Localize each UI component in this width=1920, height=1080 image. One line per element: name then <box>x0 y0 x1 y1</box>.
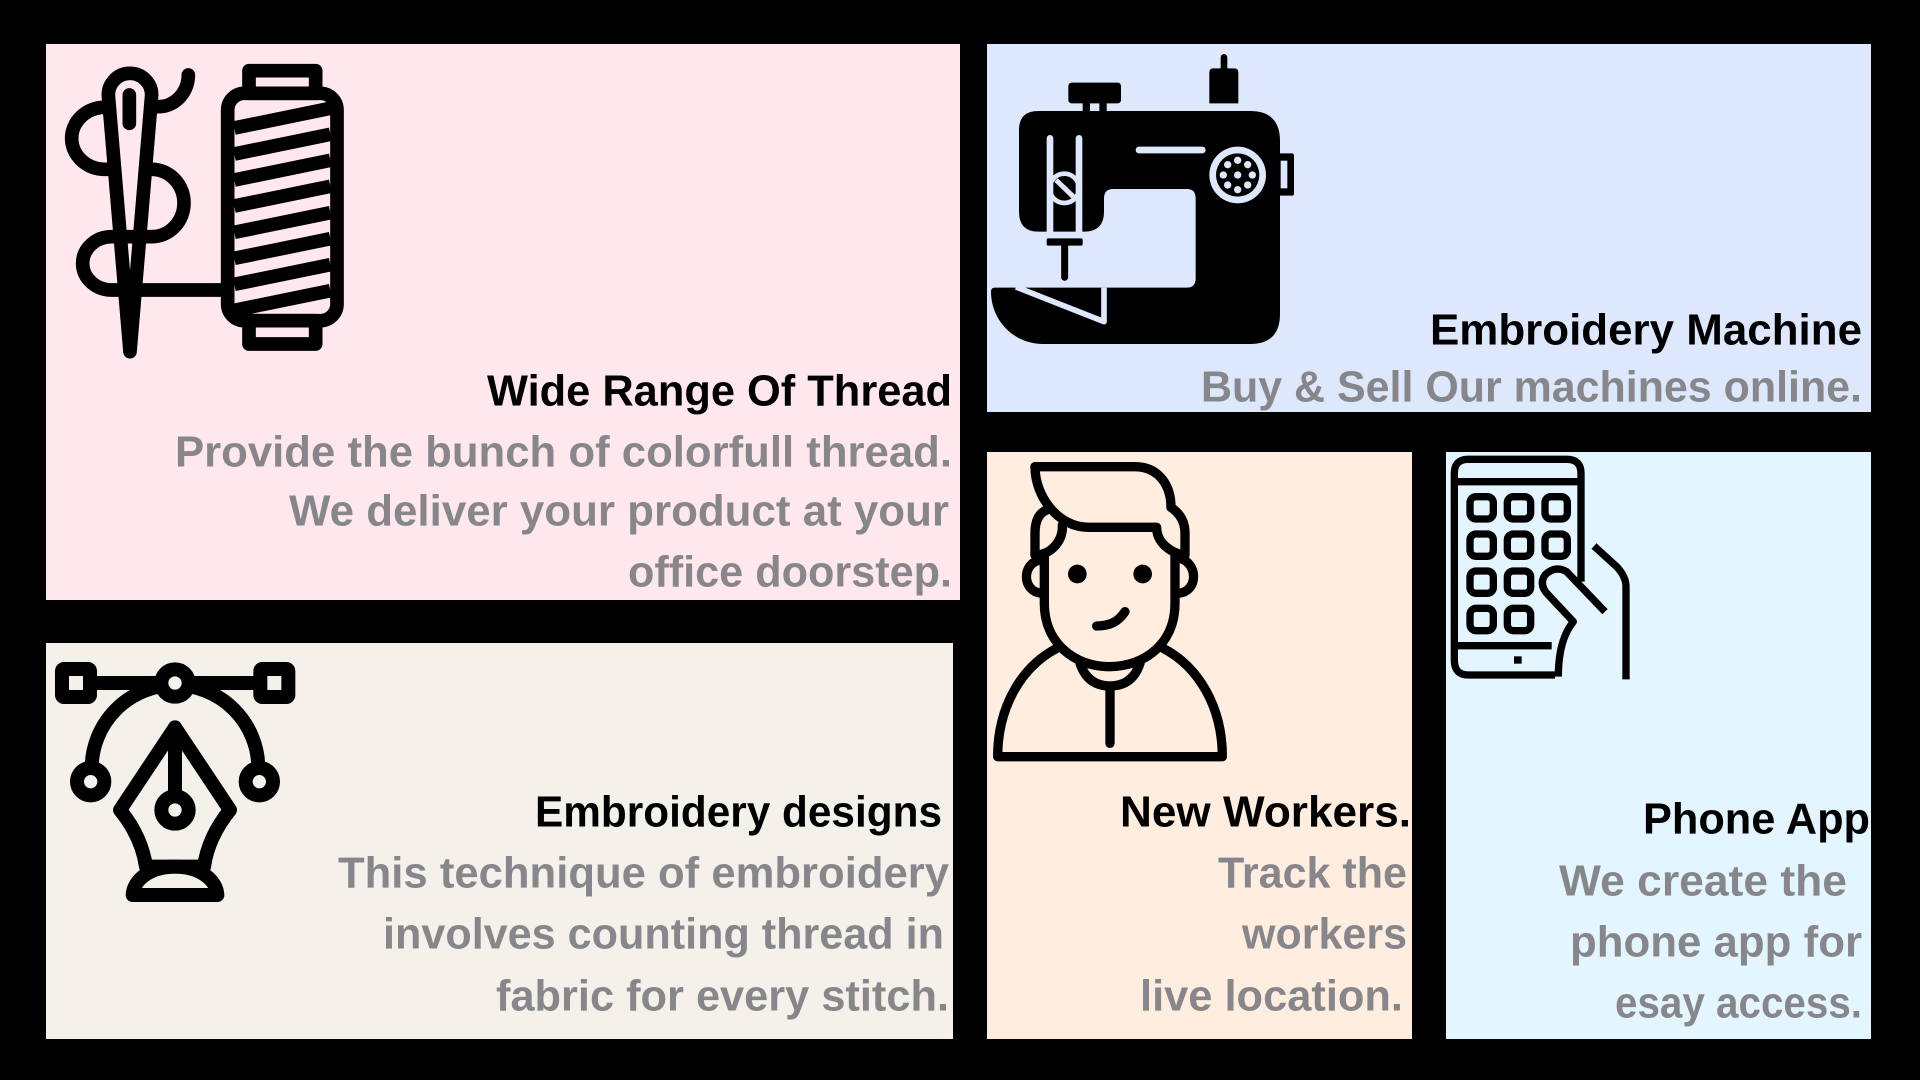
text: thread description: office doorstep. <box>628 548 952 596</box>
text: thread description <box>175 428 952 596</box>
heading: embroidery designs: Embroidery designs <box>535 788 942 836</box>
heading: wide range of thread: Wide Range Of Thread <box>487 366 952 416</box>
panel: new workers <box>987 452 1412 1039</box>
panel: embroidery designs <box>46 643 953 1039</box>
text: designs description <box>338 848 950 1020</box>
icon: sewing machine <box>991 57 1294 344</box>
panel: wide range of thread <box>46 44 960 600</box>
heading: embroidery machine: Embroidery Machine <box>1430 306 1862 354</box>
panel: embroidery machine <box>987 44 1871 412</box>
text: app description: esay access. <box>1615 978 1862 1028</box>
text: thread description: Provide the bunch of colorfull thread. <box>175 428 952 476</box>
text: thread description: We deliver your product at your <box>289 486 949 536</box>
text: app description <box>1559 856 1862 1028</box>
text: designs description: involves counting thread in <box>383 910 944 958</box>
icon: worker portrait <box>998 467 1222 757</box>
text: app description: We create the <box>1559 856 1847 906</box>
text: machine description: Buy & Sell Our machines online. <box>1201 362 1862 412</box>
icon: needle and thread spool <box>72 71 337 352</box>
icon: pen tool <box>62 669 288 895</box>
icon: hand holding phone <box>1454 459 1626 679</box>
text: workers description: live location. <box>1140 972 1403 1020</box>
text: workers description: workers <box>1241 910 1407 958</box>
heading: new workers: New Workers. <box>1120 788 1411 836</box>
panel: phone app <box>1446 452 1871 1039</box>
text: designs description: fabric for every stitch. <box>496 972 949 1020</box>
text: workers description: Track the <box>1218 848 1407 898</box>
text: workers description <box>1140 848 1407 1020</box>
text: designs description: This technique of embroidery <box>338 848 950 898</box>
heading: phone app: Phone App <box>1643 794 1870 844</box>
text: app description: phone app for <box>1570 918 1862 966</box>
